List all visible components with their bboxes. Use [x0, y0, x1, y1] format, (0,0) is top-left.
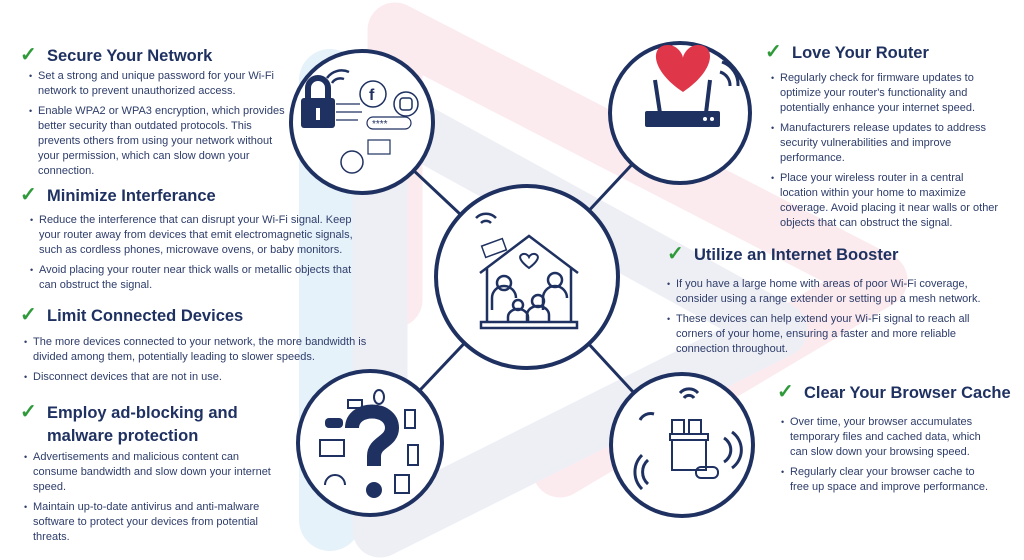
text: interference bullets [30, 214, 353, 291]
icon circle: home family (center) [436, 186, 618, 368]
heading: Employ ad-blocking [20, 401, 238, 445]
text: secure network bullets: connection. [38, 165, 94, 177]
text: router bullets [771, 72, 998, 229]
text: devices bullets [24, 336, 366, 383]
text: secure network bullets: prevents others from using your network without [38, 135, 272, 147]
text: cache bullets: Over time, your browser accumulates temporary files and cached data, which can slow down your browsing speed. [790, 416, 981, 458]
heading: Limit Connected Devices: ✓ [20, 304, 37, 326]
text: interference bullets: Reduce the interference that can disrupt your Wi-Fi signal. Keep your router away from devices that emit electromagnetic signals, such as cordless phones, microwave ovens, or baby monitors. [39, 214, 353, 256]
text: malware bullets [24, 451, 271, 543]
icon circle: cleaning [611, 374, 753, 516]
text: booster bullets: If you have a large home with areas of poor Wi-Fi coverage, consider using a range extender or setting up a mesh network. [676, 278, 981, 305]
icon circle: security: **** [372, 119, 388, 130]
text: router bullets: Place your wireless router in a central location within your home to maximize coverage. Avoid placing it near walls or other objects that can obstruct the signal. [780, 172, 998, 229]
text: secure network bullets [29, 70, 285, 177]
heading: Secure Your Network: Secure Your Network [47, 47, 212, 65]
text: devices bullets: Disconnect devices that are not in use. [33, 371, 222, 383]
heading: Minimize Interferance: Minimize Interferance [47, 187, 216, 205]
heading: Employ ad-blocking: malware protection [47, 427, 198, 445]
heading: Secure Your Network: ✓ [20, 44, 37, 66]
icon circle: router [610, 43, 750, 183]
text: secure network bullets: Set a strong and unique password for your Wi-Fi [38, 70, 274, 82]
text: cache bullets [781, 416, 988, 493]
heading: Love Your Router: Love Your Router [792, 44, 929, 62]
text: secure network bullets: network to prevent unauthorized access. [38, 85, 236, 97]
heading: Love Your Router [765, 41, 929, 63]
icon circle: security: f [369, 87, 375, 104]
text: devices bullets: The more devices connected to your network, the more bandwidth is divided among them, potentially leading to slower speeds. [33, 336, 366, 363]
text: router bullets: Regularly check for firmware updates to optimize your router's functionality and potentially enhance your internet speed. [780, 72, 975, 114]
text: malware bullets: Maintain up-to-date antivirus and anti-malware software to protect your devices from potential threats. [33, 501, 259, 543]
text: interference bullets: Avoid placing your router near thick walls or metallic objects that can obstruct the signal. [39, 264, 351, 291]
heading: Love Your Router: ✓ [765, 41, 782, 63]
heading: Employ ad-blocking: Employ ad-blocking and [47, 404, 238, 422]
text: cache bullets: Regularly clear your browser cache to free up space and improve performance. [790, 466, 988, 493]
heading: Utilize an Internet Booster: Utilize an Internet Booster [694, 246, 898, 264]
text: booster bullets: These devices can help extend your Wi-Fi signal to reach all corners of your home, ensuring a faster and more reliable connection throughout. [676, 313, 969, 355]
heading: Limit Connected Devices: Limit Connected Devices [47, 307, 243, 325]
heading: Minimize Interferance: ✓ [20, 184, 37, 206]
text: malware bullets: Advertisements and malicious content can consume bandwidth and slow down your internet speed. [33, 451, 271, 493]
text: secure network bullets: your permission, which can slow down your [38, 150, 250, 162]
icon circle: security [291, 51, 433, 193]
heading: Clear Your Browser Cache: Clear Your Browser Cache [804, 384, 1011, 402]
text: secure network bullets: better security than outdated protocols. This [38, 120, 252, 132]
text: router bullets: Manufacturers release updates to address security vulnerabilities and improve performance. [780, 122, 986, 164]
icon circle: devices question mark [298, 371, 442, 515]
text: secure network bullets: Enable WPA2 or WPA3 encryption, which provides [38, 105, 285, 117]
text: booster bullets [667, 278, 981, 355]
heading: Clear Your Browser Cache: ✓ [777, 381, 794, 403]
heading: Utilize an Internet Booster: ✓ [667, 243, 684, 265]
heading: Employ ad-blocking: ✓ [20, 401, 37, 423]
